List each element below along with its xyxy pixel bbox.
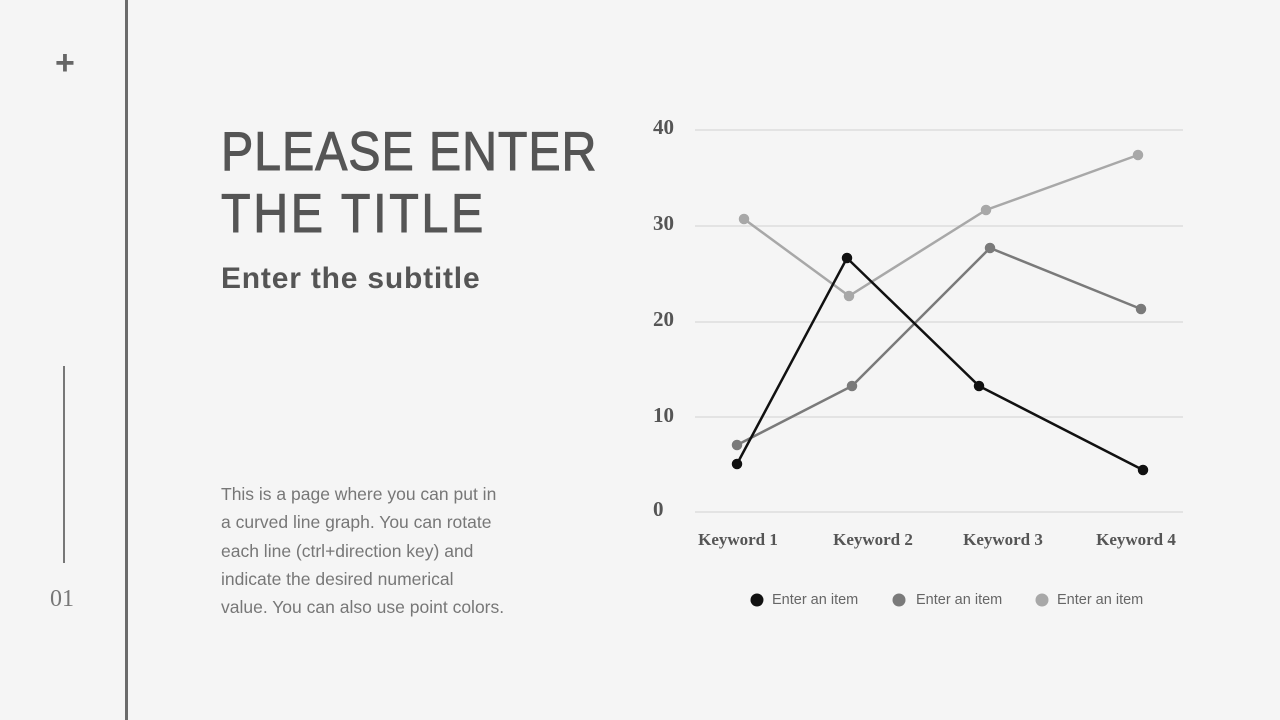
series: light gray — [740, 151, 1142, 300]
x axis labels: Keyword 1 — [698, 530, 778, 549]
title: THE TITLE — [221, 182, 486, 244]
y axis labels — [653, 115, 674, 521]
legend: Enter an item — [916, 592, 1002, 608]
description text: value. You can also use point colors. — [221, 597, 504, 617]
legend: Enter an item — [1057, 592, 1143, 608]
icon: plus: + — [55, 44, 75, 82]
legend: Enter an item — [772, 592, 858, 608]
x axis labels: Keyword 3 — [963, 530, 1043, 549]
description text — [221, 484, 504, 617]
title — [221, 120, 597, 244]
x axis labels: Keyword 4 — [1096, 530, 1176, 549]
legend — [750, 592, 1143, 608]
subtitle: Enter the subtitle — [221, 262, 480, 295]
y axis labels: 20 — [653, 307, 674, 331]
x axis labels: Keyword 2 — [833, 530, 913, 549]
y axis labels: 30 — [653, 211, 674, 235]
side accent line — [63, 366, 65, 563]
description text: a curved line graph. You can rotate — [221, 512, 491, 532]
description text: This is a page where you can put in — [221, 484, 496, 504]
x axis labels — [698, 530, 1176, 549]
title: PLEASE ENTER — [221, 120, 597, 182]
series: black — [733, 254, 1147, 474]
y axis labels: 0 — [653, 497, 664, 521]
y axis labels: 10 — [653, 403, 674, 427]
description text: each line (ctrl+direction key) and — [221, 541, 473, 561]
series: mid gray — [733, 244, 1145, 449]
y axis labels: 40 — [653, 115, 674, 139]
vertical divider line — [125, 0, 128, 720]
description text: indicate the desired numerical — [221, 569, 454, 589]
page number: 01 — [50, 586, 74, 612]
